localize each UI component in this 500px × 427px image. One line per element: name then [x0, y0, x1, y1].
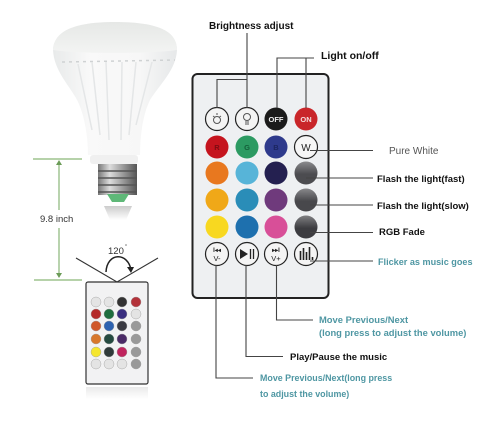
button row 6: music controls: V- — [213, 254, 221, 263]
callout: move previous/next left: Move Previous/Next(long press — [260, 373, 392, 383]
button row 6: music controls — [206, 242, 318, 266]
callout: move previous/next left: to adjust the volume) — [260, 389, 349, 399]
callout: light on/off: Light on/off — [321, 50, 379, 62]
button row 4: colours and flash slow — [206, 188, 318, 212]
height dimension: 9.8 inch: 9.8 inch — [40, 214, 73, 225]
height dimension: 9.8 inch — [33, 159, 82, 280]
callout: pure white: Pure White — [389, 146, 439, 157]
button row 2: RGB and white: W — [301, 143, 311, 154]
large remote control — [192, 74, 328, 298]
button row 6: music controls: V+ — [271, 254, 281, 263]
button row 2: RGB and white: G — [244, 143, 250, 152]
callout: brightness adjust: Brightness adjust — [209, 21, 294, 32]
button row 2: RGB and white: R — [214, 143, 220, 152]
icon: LED bulb — [53, 22, 177, 220]
callout: light on/off — [277, 50, 379, 108]
remote body — [192, 74, 328, 298]
button row 3: colours and flash fast — [206, 162, 318, 184]
viewing angle: 120 degrees — [76, 244, 158, 282]
viewing angle: 120 degrees: 120 — [108, 246, 124, 257]
callout: brightness adjust — [209, 21, 294, 108]
callout: move previous/next right: Move Previous/Next — [319, 314, 408, 325]
button row 6: music controls: I◂◂ — [213, 248, 222, 254]
button row 1: brightness and power: ON — [300, 115, 312, 124]
callout: move previous/next right — [276, 265, 466, 338]
button row 1: brightness and power: OFF — [268, 115, 284, 124]
callout: flash fast: Flash the light(fast) — [377, 174, 465, 185]
small remote control — [86, 282, 148, 399]
callout: play/pause — [246, 265, 387, 363]
callout: move previous/next right: (long press to adjust the volume) — [319, 327, 466, 338]
button row 2: RGB and white — [206, 136, 318, 158]
button row 1: brightness and power — [206, 108, 318, 130]
callout: move previous/next left — [216, 265, 392, 399]
button row 2: RGB and white: B — [273, 143, 279, 152]
callout: RGB fade — [310, 227, 425, 238]
button row 6: music controls: ▸▸I — [271, 248, 280, 254]
viewing angle: 120 degrees: ° — [125, 244, 127, 250]
callout: flicker as music goes: Flicker as music goes — [378, 257, 473, 267]
callout: play/pause: Play/Pause the music — [290, 352, 387, 363]
callout: pure white — [310, 146, 439, 157]
callout: RGB fade: RGB Fade — [379, 227, 425, 238]
button row 5: colours and RGB fade — [206, 216, 318, 238]
callout: flash slow: Flash the light(slow) — [377, 201, 469, 212]
